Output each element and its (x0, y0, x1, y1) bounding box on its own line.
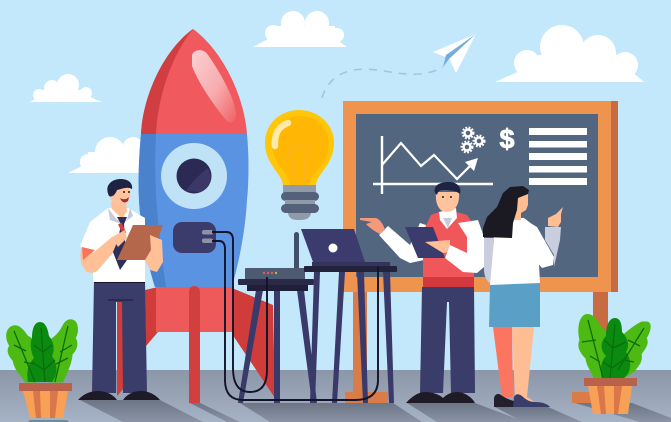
rocket fin: left, back (117, 298, 124, 396)
pointing hand (360, 218, 385, 234)
shoes (78, 391, 117, 400)
laptop (301, 229, 390, 266)
plant: left (8, 321, 76, 418)
sleeve shadow on arm (82, 247, 95, 260)
router table (238, 232, 317, 403)
cables (212, 232, 378, 400)
rocket nose (141, 29, 247, 134)
neck (111, 202, 127, 219)
woman presenting (483, 186, 563, 407)
rocket nose shade (141, 29, 193, 134)
head (435, 182, 460, 212)
board gears (462, 128, 484, 152)
ground (0, 370, 671, 422)
power plug panel (173, 222, 216, 253)
trousers (92, 281, 147, 393)
router (245, 232, 305, 280)
trousers (420, 287, 475, 393)
rocket window (161, 143, 227, 209)
board line chart (373, 136, 493, 194)
board text lines (529, 128, 587, 185)
right arm (445, 220, 484, 273)
rocket fins (145, 287, 158, 346)
grey sleeve back (484, 238, 494, 285)
shoes (494, 394, 514, 407)
tablet (405, 227, 445, 258)
pot (588, 386, 632, 414)
man with tablet (360, 182, 484, 403)
cloud: far left (30, 74, 102, 102)
chalkboard (343, 101, 618, 403)
leaves (580, 316, 607, 377)
right sleeve (545, 227, 561, 267)
pen (118, 223, 126, 234)
bulb filament (288, 146, 310, 186)
board right post (593, 290, 608, 396)
cloud: top centre (253, 11, 347, 47)
board surface (356, 114, 598, 277)
rocket body (139, 134, 248, 287)
right hand (425, 240, 450, 253)
leaves (8, 327, 36, 381)
shoes (406, 392, 475, 403)
rocket centre leg (189, 286, 200, 403)
pot (23, 391, 68, 418)
leaf veins (582, 320, 644, 378)
tie (113, 217, 127, 270)
head (107, 179, 132, 205)
laptop table (301, 229, 397, 403)
shirt (80, 208, 145, 282)
collar (439, 208, 457, 229)
board left foot (345, 392, 388, 403)
vest (423, 212, 474, 287)
right arm (525, 220, 554, 268)
left forearm (80, 237, 118, 273)
leaf veins (14, 326, 72, 382)
face and neck (510, 193, 528, 220)
rocket body shade (139, 134, 166, 287)
blouse (490, 218, 540, 285)
board dollar sign: $ (499, 124, 515, 154)
icon: paper plane (433, 34, 476, 73)
left hand (112, 230, 127, 247)
skirt (489, 277, 540, 327)
left arm sleeve (379, 223, 426, 263)
cloud: behind rocket (68, 137, 143, 173)
rocket (117, 29, 275, 403)
dashed flight path (322, 67, 443, 98)
board left post (353, 290, 367, 394)
bulb highlight (275, 123, 288, 146)
hair (483, 186, 529, 238)
rocket nose highlight (192, 50, 236, 122)
collar (108, 208, 133, 224)
man with clipboard (78, 179, 163, 400)
rocket skirt (156, 287, 234, 332)
plant: right (580, 316, 649, 414)
cloud: top right (495, 25, 644, 82)
clipboard (117, 225, 163, 260)
board right foot (572, 392, 596, 403)
legs (493, 327, 513, 397)
light bulb (265, 110, 334, 220)
bulb base (281, 185, 319, 220)
board frame (343, 101, 618, 292)
right hand and arm (145, 235, 163, 272)
hand (548, 207, 563, 227)
